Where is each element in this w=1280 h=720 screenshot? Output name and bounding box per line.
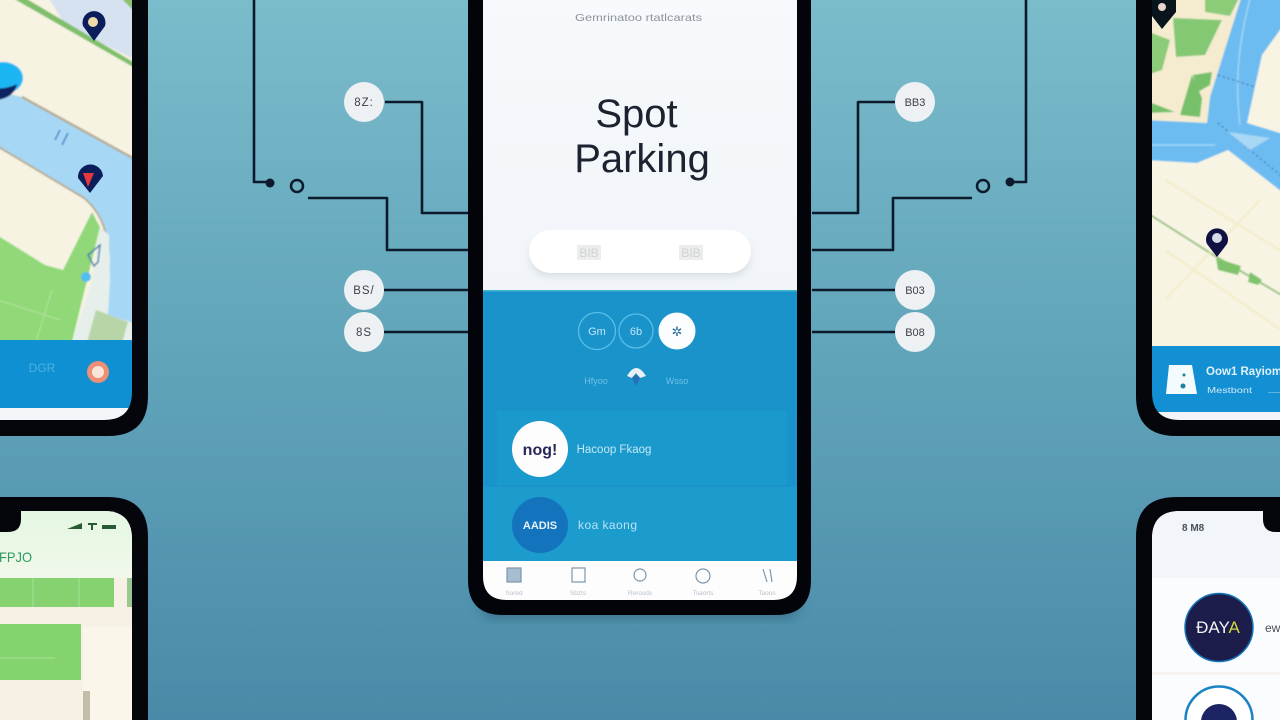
- phone: bottom left green map: [0, 497, 148, 720]
- bottom navigation: [483, 561, 797, 600]
- left connector lines: [254, 0, 468, 332]
- right badge: bottom: B08: [905, 327, 925, 339]
- selector labels: Hfyoo: [584, 376, 608, 386]
- green map blocks: [0, 578, 132, 720]
- right badge: top: [895, 82, 935, 122]
- left badge: middle: BS/: [353, 285, 375, 297]
- bottom info bar: DGR: [29, 361, 56, 375]
- title: Spot: [595, 92, 678, 136]
- map pin: bottom: [1206, 228, 1228, 257]
- left badge: top: [344, 82, 384, 122]
- nav icons: [507, 568, 772, 583]
- map: land and water: [1152, 0, 1280, 346]
- right badge: top: BB3: [905, 97, 925, 109]
- selector buttons: ✲: [672, 324, 682, 339]
- notch: [0, 511, 21, 532]
- bottom info bar: [0, 340, 132, 420]
- status icons: [67, 523, 116, 530]
- left badge: bottom: 8S: [356, 327, 372, 339]
- list item: white logo: [512, 421, 651, 477]
- phone: top right map: [1136, 0, 1280, 436]
- nav labels: Sbzts: [570, 590, 587, 597]
- list item: blue logo: AADIS: [523, 520, 557, 532]
- notch: [1263, 511, 1280, 532]
- selector labels: [584, 368, 688, 386]
- right badge: middle: [895, 270, 935, 310]
- list item: dark logo: [1185, 594, 1280, 662]
- search pill: [529, 230, 751, 276]
- right badge: bottom: [895, 312, 935, 352]
- phone: bottom right list: [1136, 497, 1280, 720]
- bottom info bar: Oow1 Rayiom: [1206, 366, 1280, 378]
- screen top: white header: [483, 0, 797, 290]
- app label: FPJO: [0, 549, 32, 565]
- selector buttons: Gm: [588, 326, 606, 338]
- selector labels: Wsso: [666, 376, 688, 386]
- map pin: top: [1152, 0, 1176, 29]
- bottom info bar: Mestbont: [1207, 385, 1253, 395]
- map: land and water: [0, 0, 132, 340]
- left badge: bottom: [344, 312, 384, 352]
- nav labels: Rerosds: [628, 590, 653, 597]
- left badge: middle: [344, 270, 384, 310]
- map pin: heart: [78, 164, 103, 193]
- list item: blue logo: koa kaong: [578, 518, 637, 532]
- search pill: BIB: [681, 246, 701, 260]
- list rows: [483, 487, 797, 561]
- phone: top left map: [0, 0, 148, 436]
- list item: blue logo: [512, 497, 637, 553]
- title: Parking: [574, 137, 710, 181]
- selector buttons: [578, 312, 696, 350]
- map pin: top: [82, 11, 105, 41]
- list item: outline logo: [1186, 686, 1252, 720]
- phone: center: [468, 0, 811, 618]
- screen middle: blue panel: [483, 290, 797, 561]
- status text: 8 M8: [1182, 523, 1205, 534]
- selector buttons: 6b: [630, 326, 642, 338]
- nav labels: Tsaorts: [693, 590, 714, 597]
- list item: dark logo: ew: [1265, 621, 1280, 635]
- subtitle: Gemrinatoo rtatlcarats: [575, 12, 702, 24]
- list item: white logo: nog!: [523, 442, 557, 459]
- left badge: top: 8Z:: [354, 97, 374, 109]
- nav labels: Taoos: [758, 590, 776, 597]
- right badge: middle: B03: [905, 285, 925, 297]
- list item: white logo: Hacoop Fkaog: [577, 444, 651, 456]
- nav labels: Sored: [505, 590, 523, 597]
- list item: dark logo: ĐAYA: [1196, 618, 1241, 637]
- title: [578, 99, 708, 180]
- search pill: BIB: [579, 246, 599, 260]
- right connector lines: [812, 0, 1026, 332]
- bottom info bar: [1152, 346, 1280, 420]
- nav labels: [506, 590, 776, 595]
